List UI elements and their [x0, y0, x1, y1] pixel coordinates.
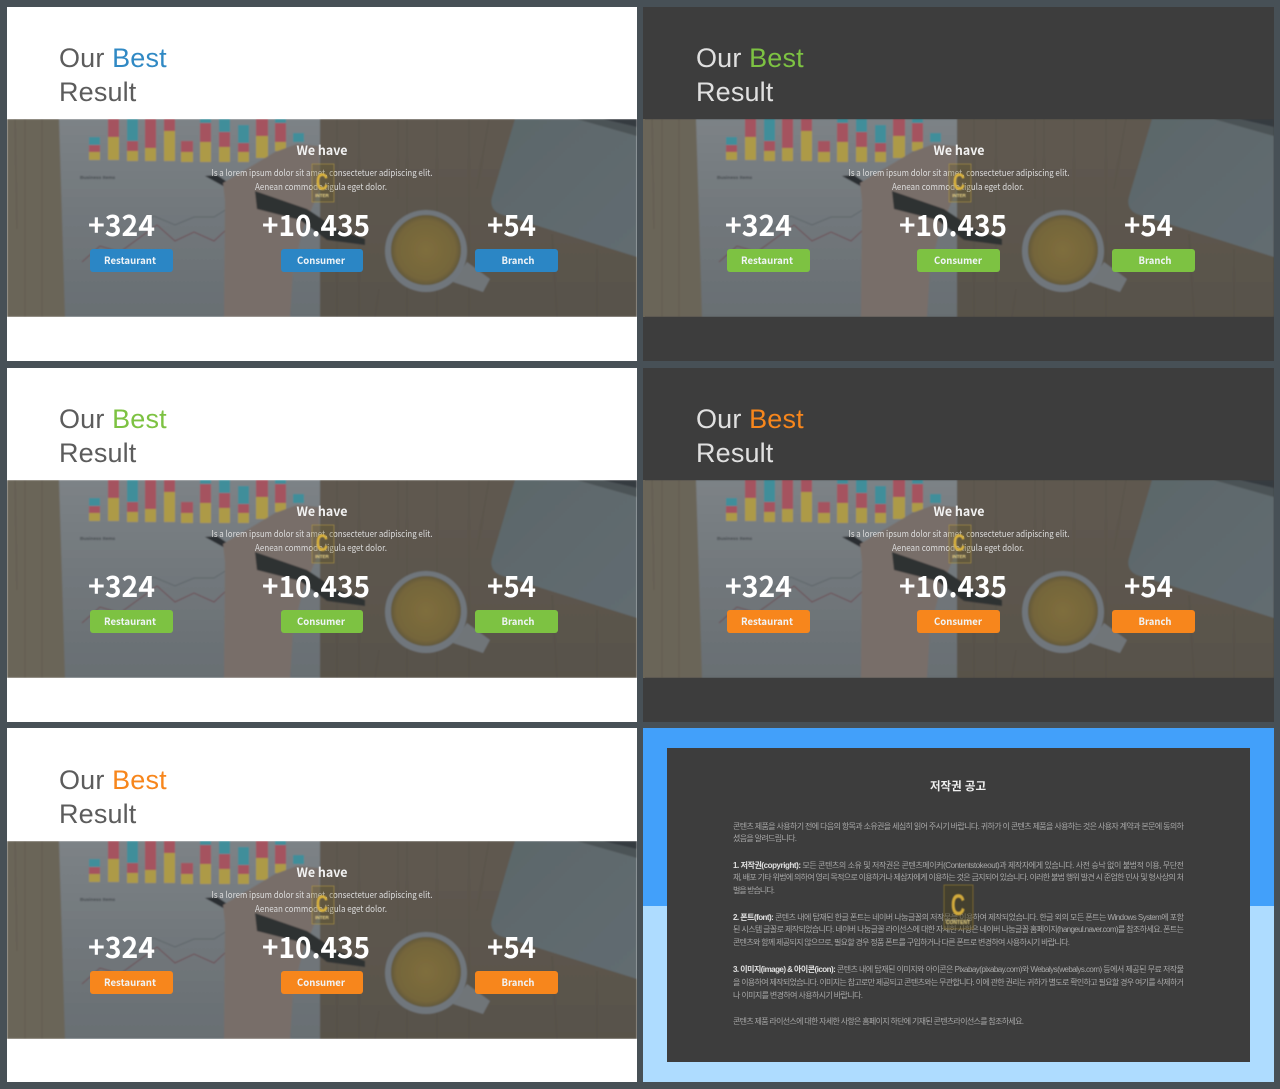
title: Result [59, 77, 137, 107]
logo watermark: INTER [315, 554, 330, 559]
logo watermark: C [316, 530, 328, 557]
notice body text: 1. 저작권(copyright): 모든 콘텐츠의 소유 및 저작권은 콘텐츠메이커(Contentstokeout)과 제작자에게 있습니다. 사전 승낙 없이 불법적 이용, 무단전 [733, 860, 1184, 870]
notice body text: 된 시스템 글꼴로 제작되었습니다. 네이버 나눔글꼴 라이선스에 대한 자세한 사항은 네이버 나눔글꼴 홈페이지(hangeul.naver.com)를 참조하세요. 폰트는 [733, 924, 1184, 934]
stat: restaurant [725, 564, 810, 633]
title [59, 404, 167, 468]
logo watermark [312, 164, 334, 202]
logo watermark: C [953, 530, 965, 557]
stat: restaurant [88, 564, 173, 633]
title: Result [59, 438, 137, 468]
intro text: We have [296, 501, 348, 520]
stat: restaurant [88, 203, 173, 272]
photo background [644, 119, 1274, 317]
stat: restaurant [725, 203, 810, 272]
stat: restaurant: +324 [88, 564, 155, 606]
intro text [848, 501, 1070, 554]
stat: branch: Branch [1138, 252, 1172, 267]
stat: consumer [262, 925, 370, 994]
intro text: We have [934, 140, 984, 159]
title [59, 765, 167, 829]
intro text: Aenean commodo ligula eget dolor. [892, 180, 1024, 193]
title: Result [59, 799, 137, 829]
notice body text: 2. 폰트(font): 콘텐츠 내에 탑재된 한글 폰트는 네이버 나눔글꼴의 저작물을 이용하여 제작되었습니다. 한글 외의 모든 폰트는 Windows System에 포함 [733, 912, 1185, 922]
logo watermark: C [316, 169, 328, 196]
title: Our Best [59, 404, 167, 434]
stat: branch [1112, 564, 1195, 633]
stat: restaurant: +324 [725, 203, 792, 245]
logo watermark: INTER [952, 193, 967, 198]
stat: branch: +54 [487, 925, 536, 967]
stat: branch: Branch [1138, 613, 1172, 628]
intro text: Is a lorem ipsum dolor sit amet, consectetuer adipiscing elit. [212, 166, 432, 179]
title [59, 43, 167, 107]
intro text: Aenean commodo ligula eget dolor. [255, 541, 387, 554]
stat: restaurant: Restaurant [741, 252, 794, 267]
panel: slide 1 blue on white [7, 7, 637, 361]
stat: consumer [262, 564, 370, 633]
notice heading: 저작권 공고 [930, 779, 986, 793]
notice body text: 나 이미지를 변경하여 사용하시기 바랍니다. [733, 990, 863, 1000]
stat: restaurant: Restaurant [104, 974, 157, 989]
title: Result [696, 77, 774, 107]
title: Result [696, 438, 774, 468]
stat: branch [1112, 203, 1195, 272]
intro text: Aenean commodo ligula eget dolor. [892, 541, 1024, 554]
stat: restaurant: Restaurant [104, 613, 157, 628]
stat: consumer: +10.435 [899, 564, 1007, 606]
stat: branch: Branch [502, 252, 534, 267]
notice body text: 콘텐츠와 함께 제공되지 않으므로, 필요할 경우 정품 폰트를 구입하거나 다른 폰트로 변경하여 사용하시기 바랍니다. [733, 937, 1070, 947]
stat: restaurant: +324 [88, 925, 155, 967]
stat: restaurant: +324 [725, 564, 792, 606]
logo watermark: CONTENT [946, 920, 970, 926]
title: Our Best [696, 404, 804, 434]
stat: branch: +54 [1124, 564, 1173, 606]
logo watermark: C [951, 889, 965, 922]
notice body text: 콘텐츠 제품 라이선스에 대한 자세한 사항은 홈페이지 하단에 기재된 콘텐츠라이선스를 참조하세요. [733, 1016, 1024, 1026]
logo watermark [944, 885, 973, 929]
title: Our Best [59, 765, 167, 795]
stat: branch: Branch [502, 974, 534, 989]
intro text: Is a lorem ipsum dolor sit amet, consectetuer adipiscing elit. [212, 527, 432, 540]
intro text: Is a lorem ipsum dolor sit amet, consectetuer adipiscing elit. [848, 166, 1070, 179]
panel: copyright notice [643, 728, 1274, 1082]
photo background [7, 480, 637, 678]
logo watermark [312, 886, 334, 924]
intro text [212, 501, 432, 554]
stat: consumer [262, 203, 370, 272]
notice body text: 재, 배포 기타 위법에 의하여 영리 목적으로 이용하거나 제삼자에게 이용하는 것은 금지되어 있습니다. 이러한 불법 행위 발견 시 준엄한 민사 및 형사상의 처 [733, 872, 1184, 882]
logo watermark [312, 525, 334, 563]
panel: slide 4 orange on dark [643, 368, 1274, 722]
intro text: Is a lorem ipsum dolor sit amet, consectetuer adipiscing elit. [212, 888, 432, 901]
stat: restaurant: Restaurant [104, 252, 157, 267]
stat: branch: +54 [1124, 203, 1173, 245]
intro text [212, 140, 432, 193]
stat: consumer: Consumer [297, 974, 346, 989]
panel: slide 3 green on white [7, 368, 637, 722]
stat: consumer: +10.435 [899, 203, 1007, 245]
stat: branch [475, 925, 558, 994]
title: Our Best [59, 43, 167, 73]
intro text: Is a lorem ipsum dolor sit amet, consectetuer adipiscing elit. [848, 527, 1070, 540]
logo watermark: INTER [315, 193, 330, 198]
logo watermark: C [316, 891, 328, 918]
title [696, 404, 804, 468]
panel: slide 2 green on dark [643, 7, 1274, 361]
stat: consumer: +10.435 [262, 564, 370, 606]
notice body text: 을 이용하여 제작되었습니다. 이미지는 참고로만 제공되고 콘텐츠와는 무관합니다. 이에 관한 권리는 귀하가 별도로 확인하고 필요할 경우 여기를 삭제하거 [733, 977, 1184, 987]
notice body text: 셨음을 알려드립니다. [733, 833, 797, 843]
stat: branch [475, 564, 558, 633]
intro text: We have [296, 140, 348, 159]
photo background [7, 841, 637, 1039]
notice body text: 3. 이미지(image) & 아이콘(icon): 콘텐츠 내에 탑재된 이미지와 아이콘은 Pixabay(pixabay.com)와 Webalys(webalys.com) 등에서 제공된 무료 저작물 [733, 964, 1184, 974]
intro text [212, 862, 432, 915]
logo watermark: INTER [952, 554, 967, 559]
intro text: Aenean commodo ligula eget dolor. [255, 180, 387, 193]
logo watermark [949, 525, 971, 563]
stat: branch [475, 203, 558, 272]
logo watermark [949, 164, 971, 202]
stat: consumer [899, 203, 1007, 272]
panel: slide 5 orange on white [7, 728, 637, 1082]
intro text: We have [934, 501, 984, 520]
notice body text [733, 821, 1185, 1026]
logo watermark: C [953, 169, 965, 196]
stat: branch: +54 [487, 203, 536, 245]
photo background [644, 480, 1274, 678]
stat: restaurant [88, 925, 173, 994]
title [696, 43, 804, 107]
notice body text: 콘텐츠 제품을 사용하기 전에 다음의 항목과 소유권을 세심히 읽어 주시기 바랍니다. 귀하가 이 콘텐츠 제품을 사용하는 것은 사용자 계약과 본문에 동의하 [733, 821, 1185, 831]
stat: restaurant: +324 [88, 203, 155, 245]
stat: restaurant: Restaurant [741, 613, 794, 628]
stat: consumer: Consumer [297, 613, 346, 628]
intro text [848, 140, 1070, 193]
stat: consumer: Consumer [934, 613, 983, 628]
stat: consumer: +10.435 [262, 203, 370, 245]
stat: consumer [899, 564, 1007, 633]
stat: consumer: Consumer [934, 252, 983, 267]
photo background [7, 119, 637, 317]
logo watermark: INTER [315, 915, 330, 920]
stat: branch: +54 [487, 564, 536, 606]
intro text: Aenean commodo ligula eget dolor. [255, 902, 387, 915]
intro text: We have [296, 862, 348, 881]
stat: branch: Branch [502, 613, 534, 628]
stat: consumer: Consumer [297, 252, 346, 267]
notice body text: 벌을 받습니다. [733, 885, 775, 895]
title: Our Best [696, 43, 804, 73]
stat: consumer: +10.435 [262, 925, 370, 967]
